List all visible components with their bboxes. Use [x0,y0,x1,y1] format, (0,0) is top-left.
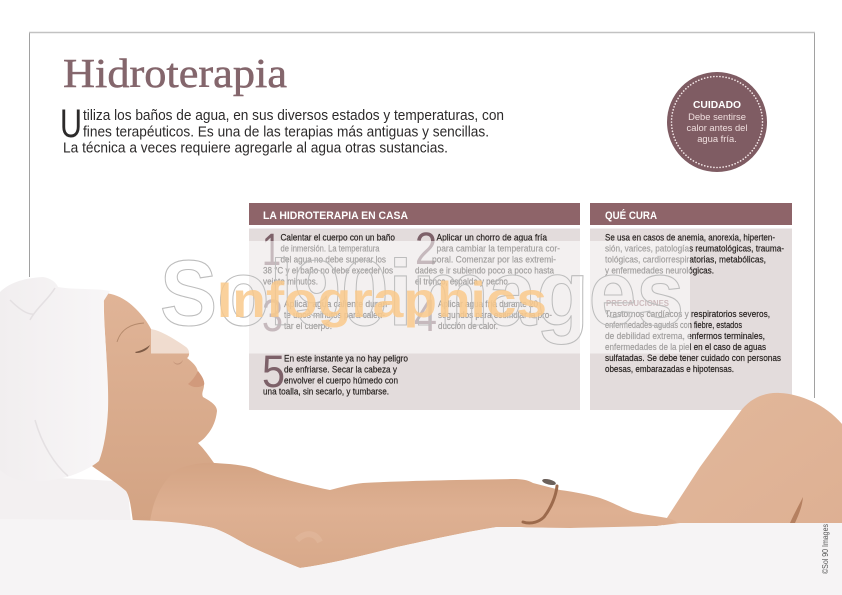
text: usos: y enfermedades neurológicas. [605,266,714,276]
head towel [0,277,110,482]
step 5 [262,346,408,398]
step 5: 5 [262,346,285,397]
step 3: Aplicar agua caliente duran- [284,299,390,310]
step 2 [415,223,560,288]
step 5: En este instante ya no hay peligro [284,354,408,364]
watermark: orange text: Infographics [217,272,547,328]
step 4: 4 [414,290,437,341]
text: usos: Se usa en casos de anemia, anorexia, hiperten- [605,232,775,244]
step 1: del agua no debe superar los [280,254,386,266]
step 4: Aplicar agua fría durante 20 [438,299,538,310]
bracelet [523,478,557,523]
step 2: 2 [415,223,437,274]
intro text: tiliza los baños de agua, en sus diversos estados y temperaturas, con [83,107,504,124]
step 3: tar el cuerpo. [284,321,332,332]
text: precauciones: de debilidad extrema, enfermos terminales, [605,331,765,342]
heading: la hidroterapia en casa [249,203,580,225]
callout: cuidado [667,72,767,172]
text: precauciones: sulfatadas. Se debe tener cuidado con personas [605,353,781,364]
arm [150,463,677,568]
towel under head [0,470,131,522]
step 4: segundos para estimular la pro- [438,310,552,321]
step 3: te unos minutos para calen- [284,310,385,321]
callout: cuidado: agua fría. [697,133,737,144]
knee [663,393,842,526]
text: usos: sión, varices, patologías reumatológicas, trauma- [605,244,784,254]
step 1: 38 °C y el baño no debe exceder los [263,266,393,276]
text: precauciones [605,298,781,375]
watermark band [151,241,690,354]
neck and face [92,293,217,522]
step 1: 1 [262,224,281,275]
text: precauciones: Trastornos cardíacos y respiratorios severos, [605,309,770,320]
photo credit: ©Sol 90 Images [821,524,830,574]
step 5: una toalla, sin secarlo, y tumbarse. [263,386,389,398]
step 2: Aplicar un chorro de agua fría [436,232,548,244]
bed towel [0,519,842,595]
callout: cuidado: CUIDADO [693,100,741,111]
step 2: dades e ir subiendo poco a poco hasta [415,266,555,276]
callout: cuidado: Debe sentirse [688,111,746,122]
step 4: ducción de calor. [438,321,498,332]
watermark: outline text: Sol90images [160,241,684,345]
step 1 [262,224,395,288]
step 3 [262,290,390,341]
photo: woman lying on towel [0,277,842,595]
step 1: Calentar el cuerpo con un baño [280,232,395,244]
eyebrow, eye, nostril, lips [117,323,204,387]
heading: la hidroterapia en casa: LA HIDROTERAPIA EN CASA [263,210,408,222]
callout: cuidado: calor antes del [687,122,747,133]
text: usos [605,232,784,276]
step 2: poral. Comenzar por las extremi- [432,254,556,266]
step 1: veinte minutos. [263,276,318,288]
text: precauciones: PRECAUCIONES [606,298,669,308]
text: precauciones: enfermedades de la piel en el caso de aguas [605,342,766,353]
step 2: el tronco, espalda y pecho. [415,276,510,288]
panel: la hidroterapia en casa [249,203,580,410]
text: usos: tológicas, cardiorrespiratorias, metabólicas, [605,254,766,266]
step 2: para cambiar la temperatura cor- [436,244,560,254]
step 3: 3 [262,290,283,341]
intro text: fines terapéuticos. Es una de las terapias más antiguas y sencillas. [83,124,489,140]
step 4 [414,290,552,341]
intro text: U [60,102,82,146]
intro text: La técnica a veces requiere agregarle al agua otras sustancias. [63,140,448,156]
text: precauciones: enfermedades agudas con fiebre, estados [605,320,742,331]
intro text [60,102,504,156]
step 1: de inmersión. La temperatura [280,244,380,254]
heading: qué cura [590,203,792,225]
heading: qué cura: QUÉ CURA [605,209,657,222]
title: Hidroterapia [63,50,287,96]
text: precauciones: obesas, embarazadas e hipotensas. [605,364,734,375]
step 5: de enfriarse. Secar la cabeza y [284,364,397,376]
panel: qué cura [590,203,792,410]
step 5: envolver el cuerpo húmedo con [284,376,398,386]
